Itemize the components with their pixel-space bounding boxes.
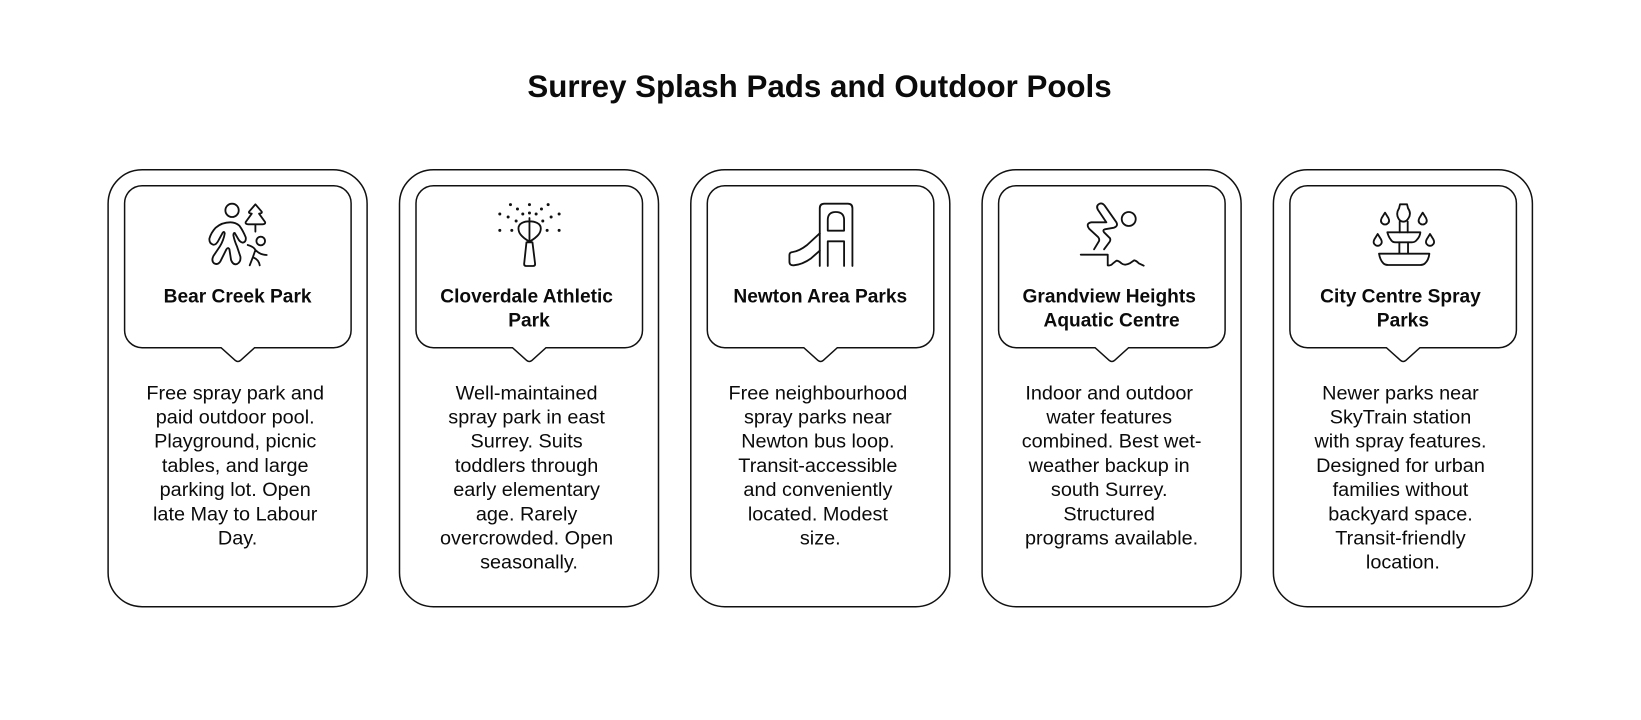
callout bubble — [707, 186, 934, 362]
card outline — [1273, 170, 1532, 607]
description: Surrey. Suits — [471, 431, 583, 453]
description: parking lot. Open — [160, 479, 311, 501]
card outline — [400, 170, 658, 607]
description: combined. Best wet- — [1022, 431, 1201, 453]
description: backyard space. — [1328, 503, 1473, 525]
panel: Newton Area Parks — [691, 170, 950, 607]
heading: Parks — [1377, 311, 1429, 332]
description: late May to Labour — [153, 503, 318, 525]
description: Transit-accessible — [738, 455, 897, 477]
icon: fountain — [1374, 204, 1434, 265]
description: located. Modest — [748, 503, 888, 525]
description: Day. — [218, 528, 257, 550]
description: programs available. — [1025, 528, 1198, 550]
panel: Bear Creek Park — [108, 170, 367, 607]
card outline — [108, 170, 367, 607]
callout bubble — [125, 186, 351, 362]
description: water features — [1045, 406, 1172, 428]
description: Indoor and outdoor — [1025, 382, 1193, 404]
description: location. — [1366, 552, 1440, 574]
heading: Aquatic Centre — [1044, 311, 1180, 332]
description: Designed for urban — [1316, 455, 1485, 477]
description: tables, and large — [162, 455, 309, 477]
description: Structured — [1063, 503, 1155, 525]
description: south Surrey. — [1051, 479, 1167, 501]
description: SkyTrain station — [1330, 406, 1471, 428]
title: Surrey Splash Pads and Outdoor Pools — [527, 69, 1112, 104]
description: overcrowded. Open — [440, 528, 613, 550]
callout bubble — [416, 186, 642, 362]
icon: person, tree and child — [209, 204, 267, 265]
description: size. — [800, 528, 841, 550]
heading: Cloverdale Athletic — [440, 286, 613, 308]
heading: Grandview Heights — [1023, 286, 1196, 308]
description: with spray features. — [1313, 431, 1487, 453]
heading: Park — [508, 311, 550, 332]
icon: playground slide — [789, 204, 852, 266]
description: paid outdoor pool. — [156, 406, 315, 428]
callout bubble — [1290, 186, 1516, 362]
description: seasonally. — [480, 552, 578, 574]
heading: Newton Area Parks — [733, 286, 907, 308]
description: spray parks near — [744, 406, 892, 428]
icon: diver — [1081, 203, 1144, 266]
description: toddlers through — [455, 455, 598, 477]
description: Free spray park and — [146, 382, 324, 404]
panel: Grandview Heights Aquatic Centre — [982, 170, 1241, 607]
description: Newer parks near — [1322, 382, 1479, 404]
description: spray park in east — [448, 406, 605, 428]
description: Playground, picnic — [154, 431, 316, 453]
heading: City Centre Spray — [1320, 286, 1481, 308]
description: families without — [1333, 479, 1469, 501]
description: Transit-friendly — [1335, 528, 1466, 550]
card outline — [982, 170, 1241, 607]
card outline — [691, 170, 950, 607]
description: early elementary — [453, 479, 600, 501]
panel: Cloverdale Athletic Park — [400, 170, 658, 607]
description: age. Rarely — [476, 503, 577, 525]
panel: City Centre Spray Parks — [1273, 170, 1532, 607]
description: weather backup in — [1028, 455, 1190, 477]
callout bubble — [999, 186, 1225, 362]
description: and conveniently — [743, 479, 892, 501]
description: Free neighbourhood — [729, 382, 907, 404]
heading: Bear Creek Park — [164, 286, 312, 308]
description: Well-maintained — [456, 382, 598, 404]
icon: sprinkler — [498, 203, 561, 266]
description: Newton bus loop. — [741, 431, 895, 453]
